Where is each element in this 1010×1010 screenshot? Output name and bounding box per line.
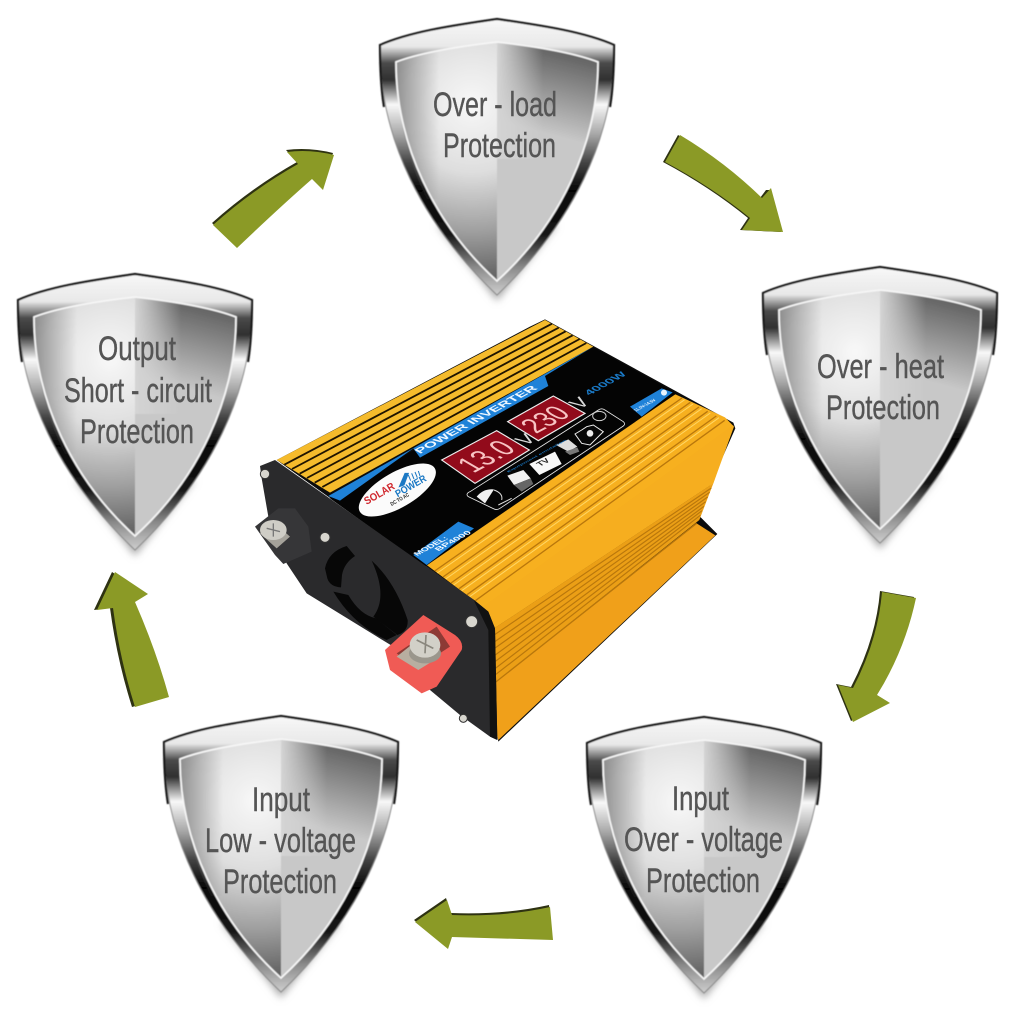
side panel aluminium heat sink: [427, 393, 734, 740]
blue badge: 11.0V-14.5V: [633, 398, 658, 413]
logo: solar power DC to AC: SOLAR: [362, 480, 397, 508]
logo: solar power DC to AC: POWER: [394, 473, 429, 500]
arrow: short-circuit to over-load: [212, 149, 334, 248]
arrow: over-load to over-heat: [663, 135, 783, 232]
panel: input over-voltage protection shield: [587, 717, 821, 999]
panel: over-heat protection shield: [763, 267, 997, 549]
shield body: [763, 267, 997, 549]
logo: solar power DC to AC: DC TO AC: [390, 492, 411, 508]
label: over-heat protection: Protection: [826, 389, 940, 427]
label: output short-circuit protection: Short - circuit: [64, 372, 212, 410]
label: over-load protection: Over - load: [433, 86, 557, 124]
LED display: input voltage: 13.0: [448, 435, 523, 477]
label: input low-voltage protection: Input: [252, 781, 310, 819]
shield body: [18, 274, 252, 556]
compatible appliance icons: Equipment emulation: [506, 439, 567, 473]
label: over-load protection: Protection: [443, 127, 556, 165]
chamfered plate corner: [473, 599, 497, 740]
label: output short-circuit protection: Protection: [80, 413, 194, 451]
panel: over-load protection shield: [380, 19, 614, 301]
top cooling fins: [277, 320, 593, 493]
label: input over-voltage protection: Input: [672, 780, 729, 818]
LED display: output voltage: 230: [514, 402, 578, 438]
arrow: low-voltage to short-circuit: [94, 572, 169, 707]
label: 4000W: 4000W: [581, 370, 630, 397]
black control panel face: [330, 347, 677, 567]
positive terminal with red cap: [385, 615, 462, 693]
LED display: input voltage: V: [511, 431, 542, 449]
label: over-heat protection: Over - heat: [817, 348, 944, 386]
shield body: [164, 716, 398, 998]
body silhouette: [277, 319, 735, 742]
front end plate: [260, 460, 497, 740]
label: input low-voltage protection: Protection: [223, 863, 337, 901]
blue badge: [630, 388, 673, 417]
arrow: over-voltage to low-voltage: [414, 898, 553, 949]
logo: solar power DC to AC: [351, 453, 444, 527]
corner screws: [260, 469, 478, 722]
panel: input low-voltage protection shield: [164, 716, 398, 998]
model tag: MODEL:: [411, 535, 451, 557]
label: input low-voltage protection: Low - voltage: [205, 822, 356, 860]
arrow: over-heat to over-voltage: [836, 591, 916, 722]
blue header strip: [328, 347, 593, 501]
shield body: [587, 717, 821, 999]
label: input over-voltage protection: Over - voltage: [624, 821, 783, 859]
panel: output short-circuit protection shield: [18, 274, 252, 556]
model tag: BP4000: [432, 529, 474, 552]
cooling fan opening: [325, 546, 408, 640]
label: input over-voltage protection: Protection: [646, 862, 760, 900]
heading: power inverter: POWER INVERTER: [411, 384, 541, 455]
compatible appliance icons: TV: [534, 457, 552, 468]
shield body: [380, 19, 614, 301]
LED display: output voltage: V: [565, 394, 596, 412]
negative terminal: [255, 508, 312, 564]
label: output short-circuit protection: Output: [98, 330, 176, 368]
model tag: [411, 522, 474, 565]
power inverter product illustration: [255, 319, 735, 742]
compatible appliance icons: [467, 409, 625, 510]
